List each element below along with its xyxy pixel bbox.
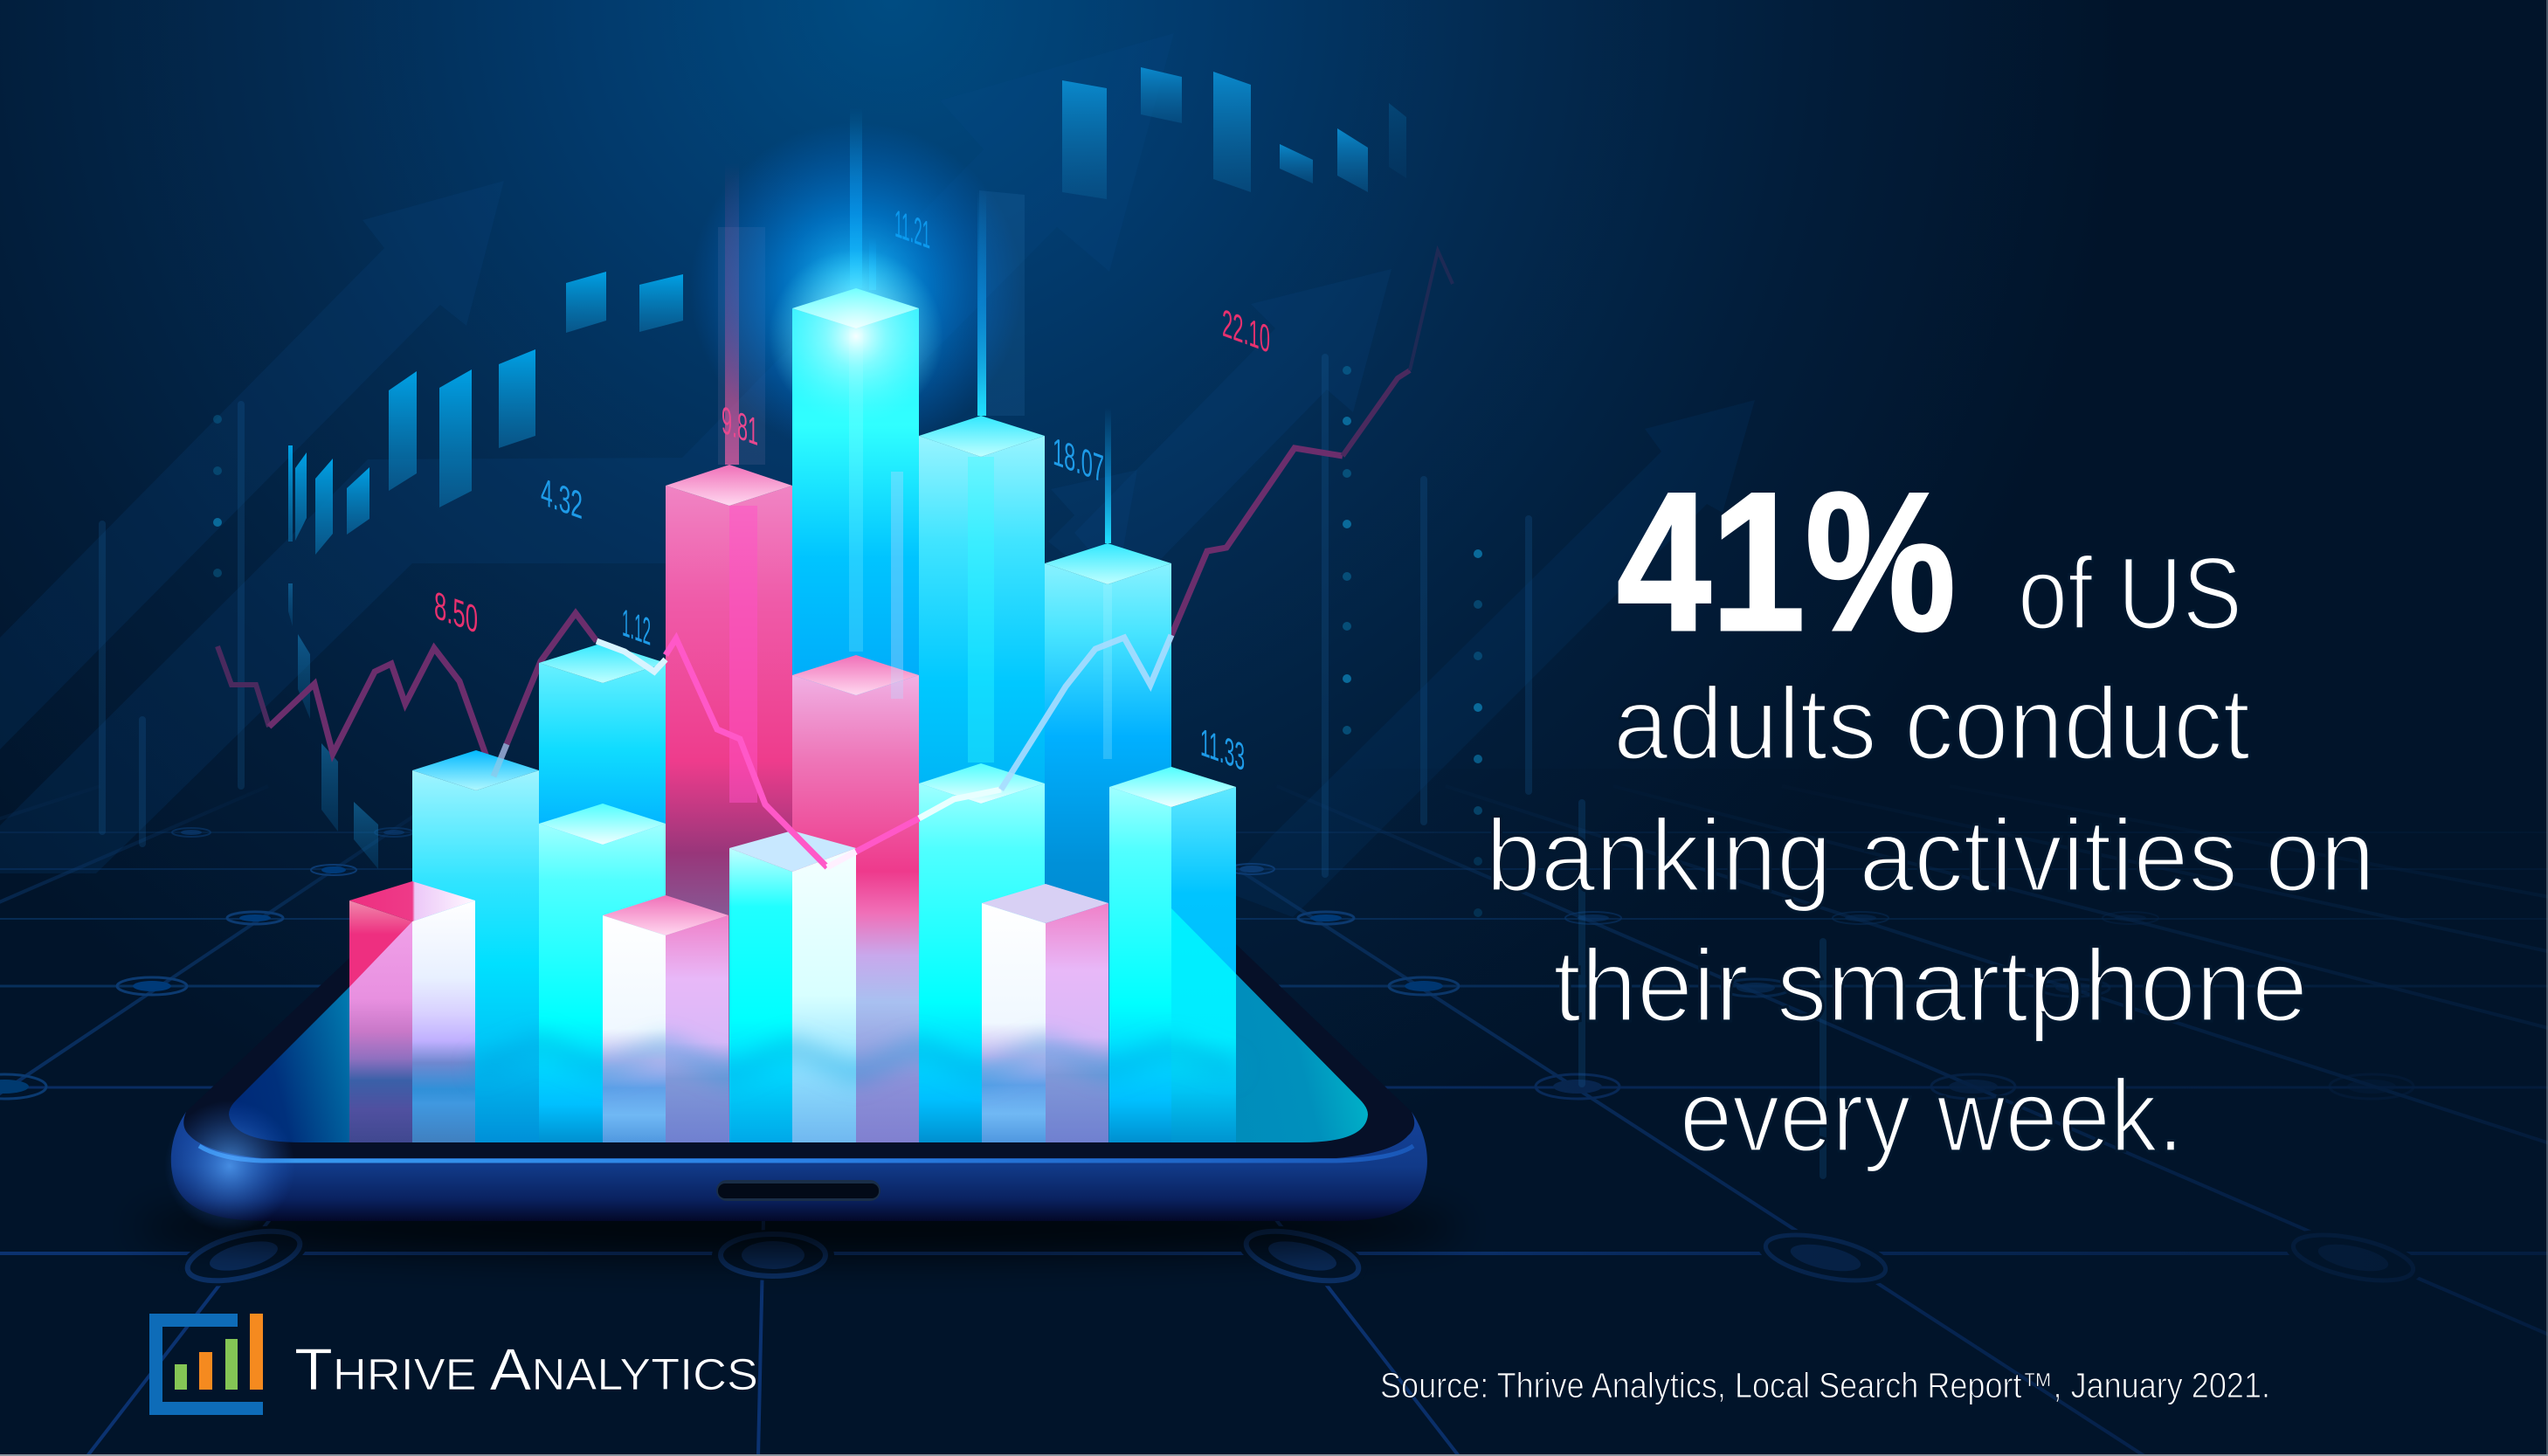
floating value labels: 11.21 xyxy=(894,201,930,258)
bar: cyan right xyxy=(1109,767,1236,1142)
bar: white center xyxy=(729,831,856,1142)
headline text: of US xyxy=(2018,536,2242,652)
arrow: left xyxy=(0,181,504,749)
smartphone xyxy=(135,904,1463,1257)
headline text xyxy=(1486,451,2375,1174)
bar: tallest blue xyxy=(792,288,919,1142)
highlight at top of tallest bar xyxy=(769,249,943,424)
light beams xyxy=(718,107,1111,543)
phone shadow xyxy=(135,1197,1463,1257)
bar: light blue right xyxy=(1045,543,1171,1142)
source note: Source: Thrive Analytics, Local Search Report™, January 2021. xyxy=(1380,1365,2270,1405)
background arrows xyxy=(0,33,1755,917)
arrow: small behind bars xyxy=(1048,470,1137,576)
bar: blue 1.12 xyxy=(539,643,666,1142)
bar: blue left xyxy=(412,750,539,1142)
faint vertical data lines xyxy=(99,354,1826,1179)
floating value labels: 4.32 xyxy=(541,469,583,528)
phone corner glint xyxy=(164,1101,295,1232)
floating value labels: 9.81 xyxy=(722,397,758,454)
line chart: part over bars xyxy=(494,635,1171,867)
reflection on bar bases xyxy=(475,1042,1236,1074)
dotted columns xyxy=(213,366,1482,917)
perspective floor grid xyxy=(0,769,2548,1456)
logo wordmark: THRIVE ANALYTICS xyxy=(294,1336,758,1403)
phone bezel xyxy=(183,904,1414,1158)
phone screen xyxy=(229,908,1368,1142)
floating value labels: 8.50 xyxy=(434,583,478,642)
headline text: their smartphone xyxy=(1553,928,2308,1044)
line chart: part behind bars xyxy=(218,251,1453,776)
bar: white pink xyxy=(603,895,728,1142)
floating value labels: 1.12 xyxy=(622,600,651,654)
phone edge highlight xyxy=(199,1146,1413,1161)
3D bar chart xyxy=(349,122,1236,1142)
grid lines xyxy=(0,786,2548,1456)
bar: light blue xyxy=(919,416,1045,1142)
headline text: 41% xyxy=(1617,451,1956,672)
logo: Thrive Analytics xyxy=(149,1314,758,1415)
floating value labels: 11.33 xyxy=(1200,720,1245,779)
bar: pink lower xyxy=(792,655,919,1142)
bar: pink white left xyxy=(349,881,475,1142)
glow behind tallest bar xyxy=(690,122,1022,454)
arrow: upper right of chart xyxy=(1074,269,1391,594)
text: 22.10 xyxy=(1222,300,1270,362)
logo icon xyxy=(149,1314,263,1415)
translucent stripes on bars xyxy=(729,328,1112,803)
bar: cyan front left xyxy=(539,804,666,1142)
grid fade toward the right xyxy=(1310,769,2548,1456)
floating value labels: 18.07 xyxy=(1053,429,1104,491)
bar: cyan front center xyxy=(919,763,1045,1142)
headline text: adults conduct xyxy=(1613,666,2250,782)
headline text: every week. xyxy=(1680,1059,2184,1174)
grid nodes xyxy=(0,828,2427,1297)
arrow: right xyxy=(1223,400,1755,917)
bar: tall pink xyxy=(666,465,792,1142)
candlesticks xyxy=(288,67,1406,869)
headline text: banking activities on xyxy=(1486,798,2375,914)
floating value labels xyxy=(434,201,1270,779)
phone port xyxy=(716,1180,880,1201)
phone body xyxy=(171,1112,1427,1221)
bar: white pink right xyxy=(982,884,1108,1142)
arrow: bent top center xyxy=(0,33,1174,873)
